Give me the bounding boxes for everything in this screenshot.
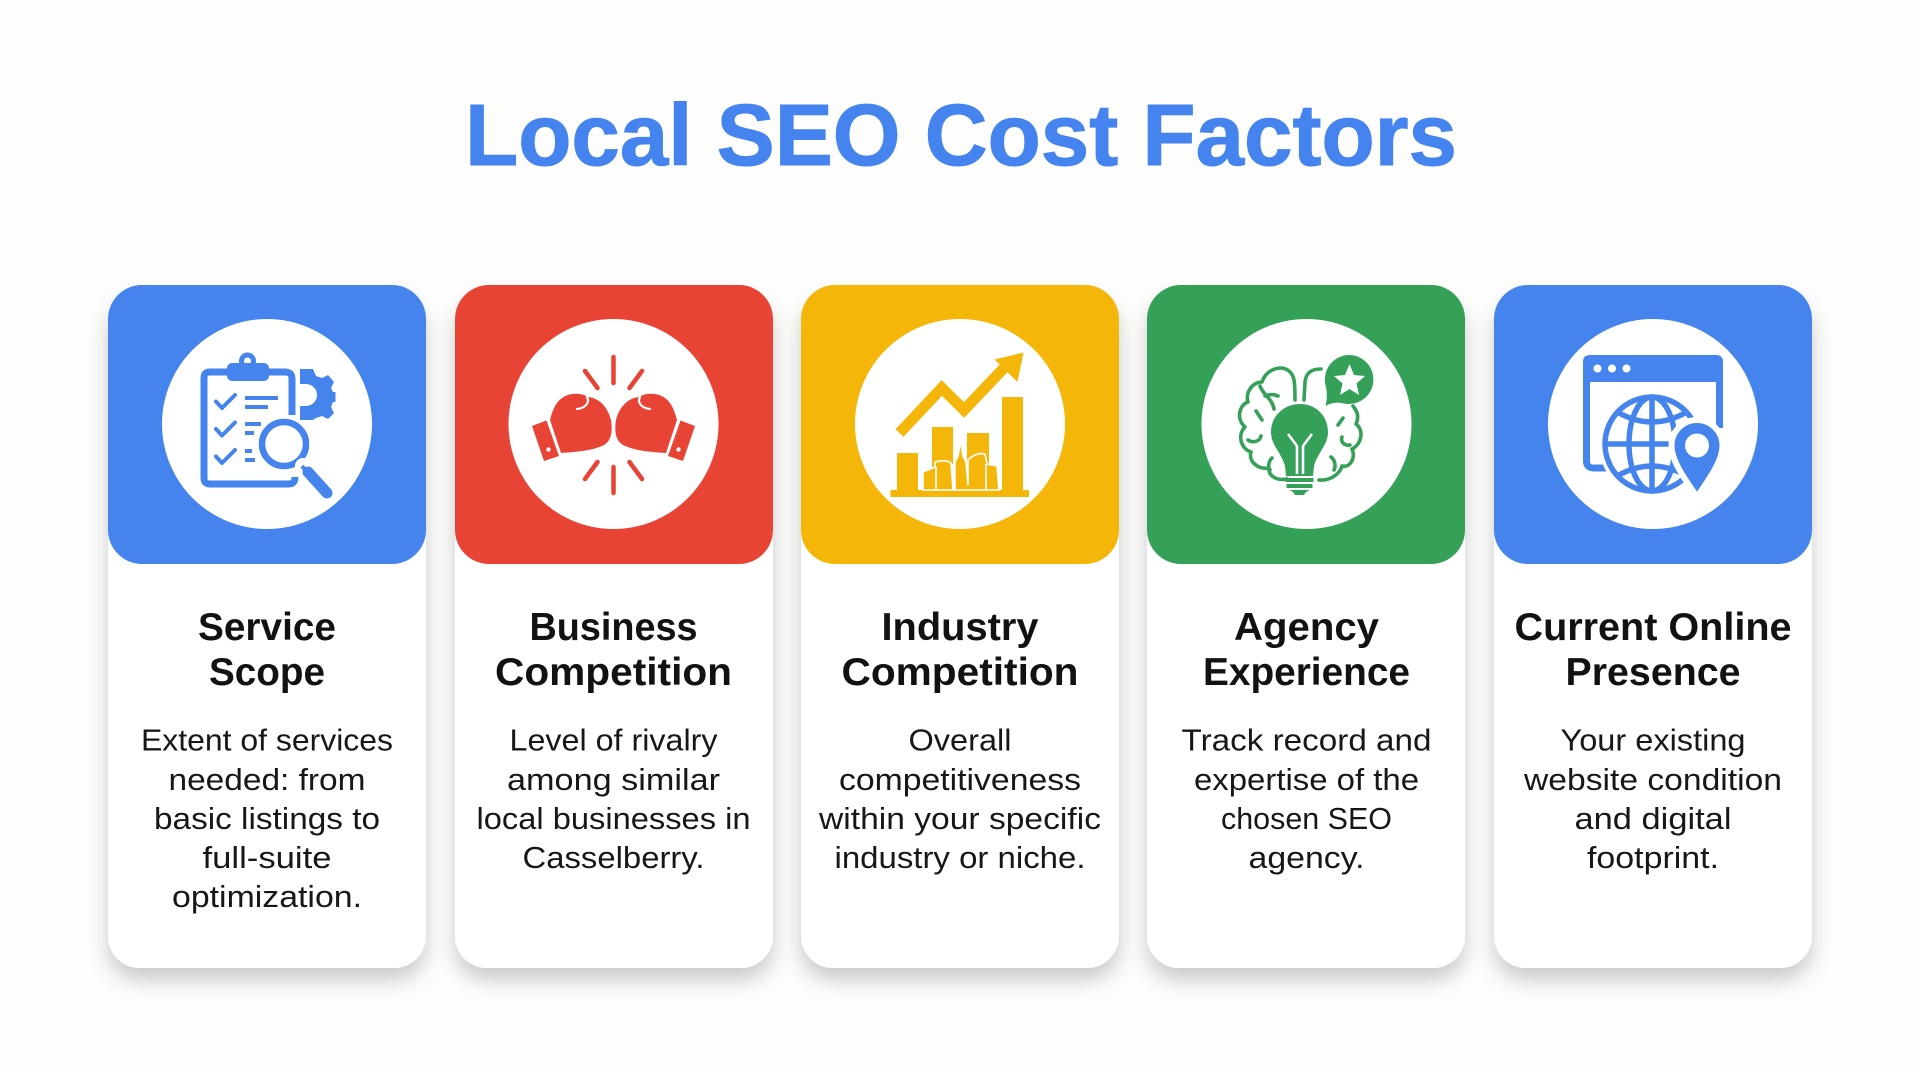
description: Extent of services	[141, 724, 393, 758]
heading: Agency	[1234, 606, 1379, 649]
heading	[1203, 606, 1410, 694]
heading: Presence	[1566, 651, 1740, 694]
description	[818, 724, 1101, 875]
right glove	[615, 394, 695, 461]
icon: browser, globe and pin	[1548, 319, 1758, 529]
description: expertise of the	[1194, 763, 1419, 797]
description: website condition	[1523, 763, 1782, 797]
description	[141, 724, 393, 914]
panel: agency experience	[1147, 285, 1465, 968]
header: blue	[1494, 285, 1812, 564]
skyline	[923, 441, 999, 490]
description: and digital	[1574, 802, 1732, 836]
description: competitiveness	[839, 763, 1081, 797]
header: yellow	[801, 285, 1119, 564]
arrow	[900, 368, 1004, 433]
heading: Experience	[1203, 651, 1410, 694]
heading: Competition	[495, 651, 732, 694]
panel: industry competition	[801, 285, 1119, 968]
magnifier	[257, 417, 327, 493]
heading: Competition	[842, 651, 1078, 694]
panel: service scope	[108, 285, 426, 968]
globe	[1602, 394, 1702, 494]
gear	[299, 369, 336, 420]
bars	[890, 397, 1029, 497]
heading: Business	[530, 606, 698, 649]
description	[1523, 724, 1782, 875]
description: footprint.	[1587, 841, 1719, 875]
heading: Industry	[882, 606, 1039, 649]
description: optimization.	[172, 880, 362, 914]
icon: clipboard, gear and magnifier	[162, 319, 372, 529]
description: local businesses in	[476, 802, 750, 836]
icon: rising chart with skyline	[855, 319, 1065, 529]
panel: business competition	[455, 285, 773, 968]
description: chosen SEO	[1221, 802, 1392, 836]
heading: Scope	[209, 651, 325, 694]
title: Local SEO Cost Factors	[465, 87, 1457, 184]
description: Casselberry.	[522, 841, 704, 875]
description: full-suite	[202, 841, 332, 875]
heading	[1514, 606, 1792, 694]
heading	[198, 606, 336, 694]
description	[1182, 724, 1432, 875]
description: Level of rivalry	[510, 724, 718, 758]
header: green	[1147, 285, 1465, 564]
heading	[495, 606, 732, 694]
pin	[1672, 420, 1722, 497]
description: basic listings to	[154, 802, 380, 836]
header: blue	[108, 285, 426, 564]
browser window	[1583, 355, 1723, 468]
description: industry or niche.	[834, 841, 1086, 875]
brain	[1240, 368, 1361, 480]
icon: brain, light bulb and star bubble	[1202, 319, 1412, 529]
bubble	[1325, 355, 1373, 406]
description: within your specific	[818, 802, 1101, 836]
heading	[842, 606, 1078, 694]
heading: Service	[198, 606, 336, 649]
left glove	[532, 394, 612, 461]
panel: current online presence	[1494, 285, 1812, 968]
description	[476, 724, 750, 875]
header: red	[455, 285, 773, 564]
icon: boxing gloves	[508, 319, 718, 529]
description: Track record and	[1182, 724, 1432, 758]
description: Your existing	[1560, 724, 1746, 758]
description: Overall	[908, 724, 1012, 758]
description: among similar	[507, 763, 720, 797]
heading: Current Online	[1514, 606, 1792, 649]
bulb	[1271, 404, 1328, 476]
description: needed: from	[168, 763, 366, 797]
description: agency.	[1248, 841, 1364, 875]
